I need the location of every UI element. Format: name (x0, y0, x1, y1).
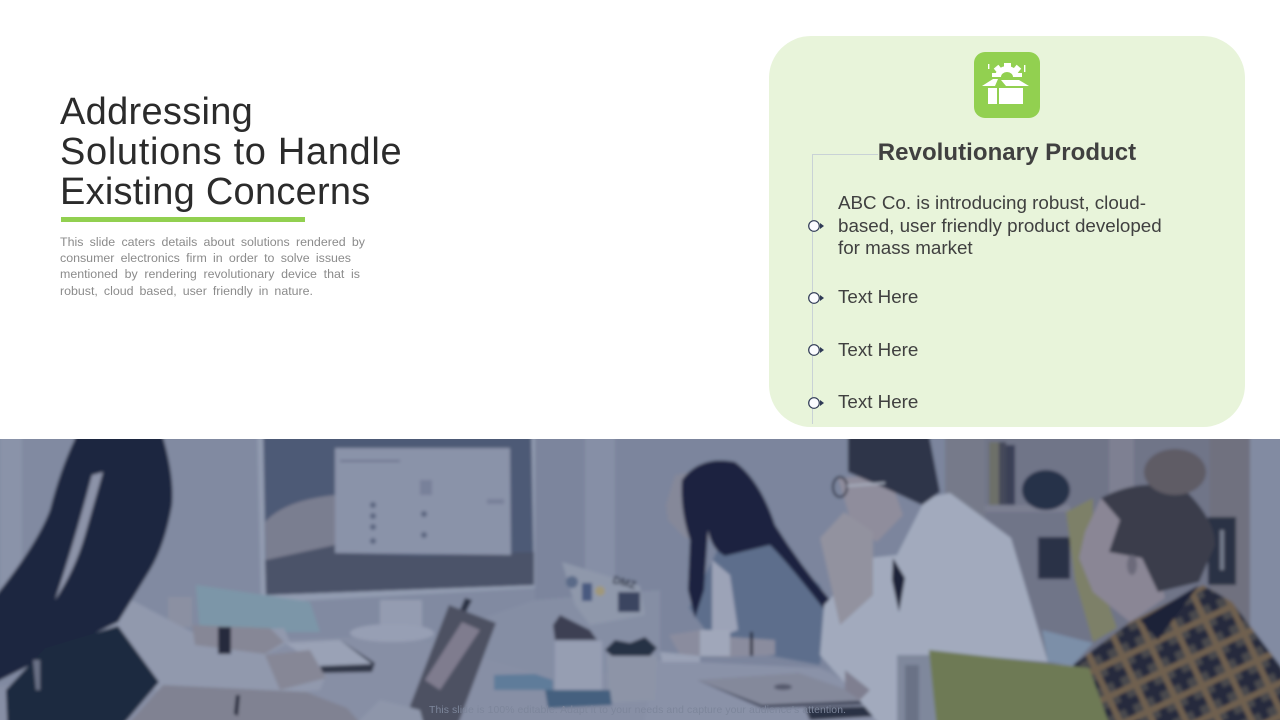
bullet item 1 (808, 192, 1162, 258)
title (60, 91, 402, 213)
woman center (660, 460, 830, 665)
laptop with stickers: DMZ (611, 574, 638, 592)
photo: team meeting (0, 439, 1280, 720)
woman left (0, 419, 375, 720)
panel: revolutionary product (769, 36, 1245, 427)
bullet item 2: Text Here (838, 286, 918, 307)
laptop hp (697, 673, 880, 720)
laptop center (340, 598, 496, 720)
bullet item 1: based, user friendly product developed (838, 215, 1162, 236)
connector line (812, 154, 878, 424)
description text (60, 235, 365, 298)
green laptop (929, 650, 1115, 720)
bullet item 1: for mass market (838, 237, 973, 258)
title: Solutions to Handle (60, 131, 402, 173)
icon: box with gear (974, 52, 1040, 118)
description text: robust, cloud based, user friendly in nature. (60, 284, 313, 298)
yellow chair (1066, 498, 1117, 642)
bullet item 4: Text Here (838, 391, 918, 412)
monitor (257, 419, 535, 642)
cup and plant (494, 615, 657, 708)
woman right (1073, 449, 1280, 720)
shelves (945, 419, 1280, 679)
teal chair (196, 585, 320, 632)
title: Existing Concerns (60, 171, 370, 213)
blue chair (1042, 630, 1093, 665)
bottle (168, 597, 192, 627)
bullet item 1: ABC Co. is introducing robust, cloud- (838, 192, 1146, 213)
footer text: This slide is 100% editable. Adapt it to your needs and capture your audience's attention. (429, 705, 846, 716)
laptop with stickers (562, 562, 645, 625)
title underline (61, 217, 305, 222)
heading: Revolutionary Product (878, 139, 1136, 166)
bullet item 3: Text Here (838, 339, 918, 360)
notebook (320, 640, 375, 673)
title: Addressing (60, 91, 253, 133)
man with glasses (820, 419, 1048, 720)
description text: This slide caters details about solutions rendered by (60, 235, 365, 249)
description text: consumer electronics firm in order to solve issues (60, 251, 351, 265)
description text: mentioned by rendering revolutionary device that is (60, 267, 360, 281)
table (0, 590, 930, 720)
